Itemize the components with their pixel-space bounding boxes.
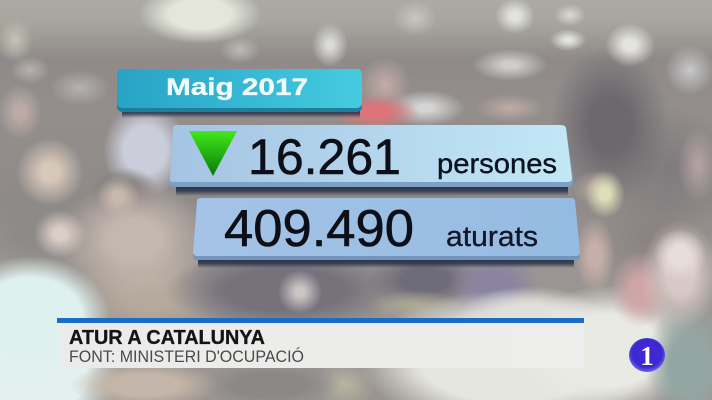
panel: date label <box>117 69 362 118</box>
text: total value: 409.490 <box>224 200 414 258</box>
icon: TVE 1 channel logo <box>629 338 665 372</box>
panel: total unemployed <box>193 198 580 268</box>
icon: green down triangle <box>189 131 237 176</box>
text: monthly change value: 16.261 <box>248 129 401 185</box>
text: aturats: aturats <box>446 221 538 253</box>
text: date: Maig 2017 <box>166 74 308 101</box>
caption source: FONT: MINISTERI D'OCUPACIÓ <box>69 347 304 366</box>
panel: monthly change <box>170 125 573 196</box>
caption heading: ATUR A CATALUNYA <box>69 327 265 349</box>
text: persones: persones <box>437 148 557 179</box>
lower third caption <box>57 318 584 368</box>
icon: TVE 1 channel logo: 1 <box>640 341 654 371</box>
